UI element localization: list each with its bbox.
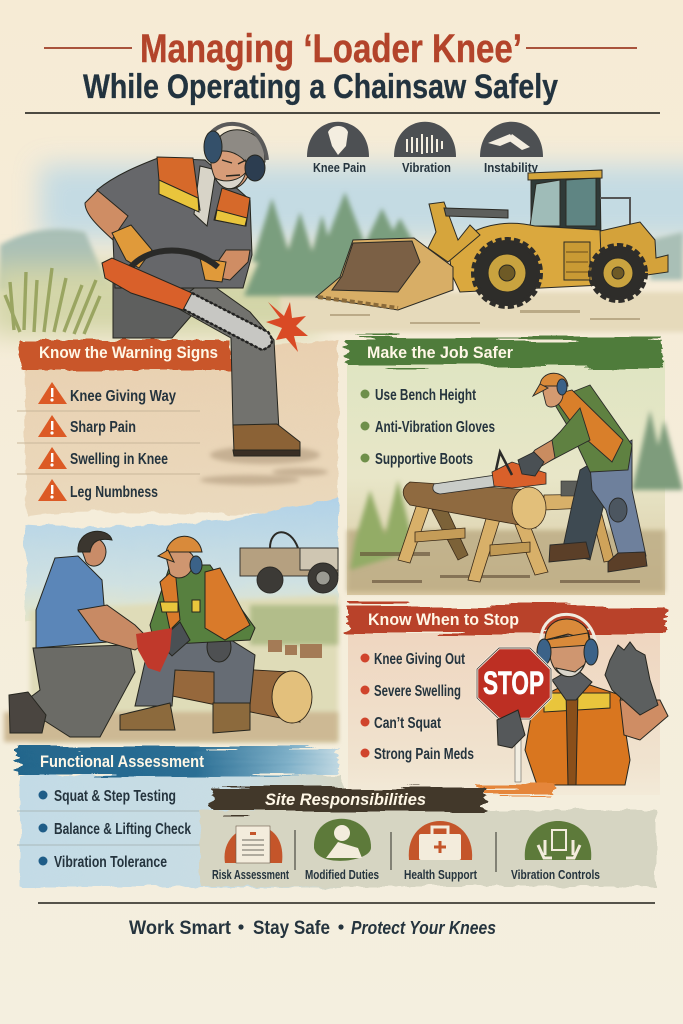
safer panel background <box>347 360 665 595</box>
warning heading: Know the Warning Signs <box>39 343 218 362</box>
stop sign: STOP <box>483 665 544 701</box>
footer tagline: Work Smart <box>129 918 232 939</box>
chainsaw on log <box>433 452 546 494</box>
orange brush strokes <box>478 785 553 798</box>
grass tuft <box>5 268 100 334</box>
ground patch under boot <box>200 446 328 485</box>
panel: stop background <box>348 633 660 795</box>
icon: modified duties <box>314 819 371 861</box>
safer list <box>360 387 495 468</box>
injured knee highlight <box>136 628 172 672</box>
safer heading: Make the Job Safer <box>367 343 513 362</box>
icon: risk assessment <box>225 826 282 863</box>
icon: warning triangle <box>38 447 67 469</box>
stop list: Strong Pain Meds <box>374 746 474 763</box>
warning banner <box>20 340 230 370</box>
warning list: Swelling in Knee <box>70 451 168 468</box>
bucket <box>316 238 453 310</box>
stop heading: Know When to Stop <box>368 610 519 629</box>
title: Managing ‘Loader Knee’ <box>140 27 522 71</box>
main worker with chainsaw <box>85 124 300 456</box>
label: health support: Health Support <box>404 867 478 882</box>
safer banner <box>346 339 662 367</box>
panel: assessment scene <box>4 497 338 742</box>
warning list <box>17 382 200 501</box>
stop list: Can’t Squat <box>374 715 442 732</box>
trees <box>244 192 425 296</box>
safer list: Supportive Boots <box>375 451 473 468</box>
safer list: Use Bench Height <box>375 387 476 404</box>
assessment ground <box>30 595 338 742</box>
panel: make the job safer <box>346 339 683 595</box>
title: While Operating a Chainsaw Safely <box>83 68 558 106</box>
panel: warning signs background <box>24 340 338 516</box>
label: vibration controls: Vibration Controls <box>511 867 600 882</box>
icon row: knee pain, vibration, instability <box>307 122 543 175</box>
icon: vibration <box>394 122 456 175</box>
icon: health support <box>409 821 472 860</box>
responsibilities banner <box>212 787 484 812</box>
icon: vibration: Vibration <box>402 160 451 175</box>
icon: instability <box>480 122 543 175</box>
icon: knee pain <box>307 122 369 175</box>
front wheel <box>474 240 540 306</box>
stop worker <box>525 614 668 785</box>
cab <box>531 172 601 242</box>
stop banner <box>348 605 666 633</box>
stop list <box>360 651 474 763</box>
wheel loader <box>316 170 668 310</box>
rail <box>600 198 630 225</box>
truck <box>240 532 338 593</box>
small can on bench <box>561 481 584 496</box>
stop list: Knee Giving Out <box>374 651 465 668</box>
assessment sky <box>25 497 338 620</box>
title <box>25 27 660 114</box>
stop list: Severe Swelling <box>374 683 461 700</box>
worker at bench <box>518 373 647 572</box>
assessment banner <box>17 748 338 776</box>
log seat <box>170 665 312 723</box>
responsibilities background <box>200 810 656 886</box>
icon: knee pain: Knee Pain <box>313 160 366 175</box>
head <box>211 144 250 189</box>
chainsaw <box>131 250 218 267</box>
lift arm <box>428 202 480 262</box>
icon: vibration controls <box>525 821 591 860</box>
stop sign <box>477 648 551 782</box>
main body <box>449 223 602 292</box>
assessment panel background <box>20 775 342 887</box>
warning list: Leg Numbness <box>70 484 158 501</box>
ladder <box>564 242 590 280</box>
label: risk assessment: Risk Assessment <box>212 867 289 882</box>
footer tagline: Stay Safe <box>253 918 330 939</box>
rear wheel <box>591 246 645 300</box>
responsibilities heading: Site Responsibilities <box>265 790 426 809</box>
assessment heading: Functional Assessment <box>40 752 204 771</box>
assessment list <box>17 788 200 871</box>
assessment list: Squat & Step Testing <box>54 788 176 805</box>
footer tagline: Protect Your Knees <box>351 918 496 938</box>
assessment list: Vibration Tolerance <box>54 854 167 871</box>
site responsibilities panel <box>200 787 656 886</box>
warning list: Sharp Pain <box>70 419 136 436</box>
rear body <box>596 222 668 280</box>
functional assessment panel <box>17 748 342 887</box>
assessment list: Balance & Lifting Check <box>54 821 191 838</box>
footer tagline <box>38 902 655 939</box>
sawhorse and log <box>398 482 614 582</box>
hero backdrop: sky, hills, trees, ground <box>0 165 683 335</box>
icon: warning triangle <box>38 415 67 437</box>
safer list: Anti-Vibration Gloves <box>375 419 495 436</box>
kneeling man in blue <box>9 531 150 737</box>
icon: warning triangle <box>38 382 67 404</box>
label: modified duties: Modified Duties <box>305 867 379 882</box>
warning list: Knee Giving Way <box>70 388 176 405</box>
ground specks <box>330 310 640 324</box>
pain burst at knee <box>266 302 308 352</box>
safer scene ground and trees <box>347 410 683 592</box>
seated worker <box>120 536 255 733</box>
icon: instability: Instability <box>484 160 539 175</box>
icon: warning triangle <box>38 479 67 501</box>
